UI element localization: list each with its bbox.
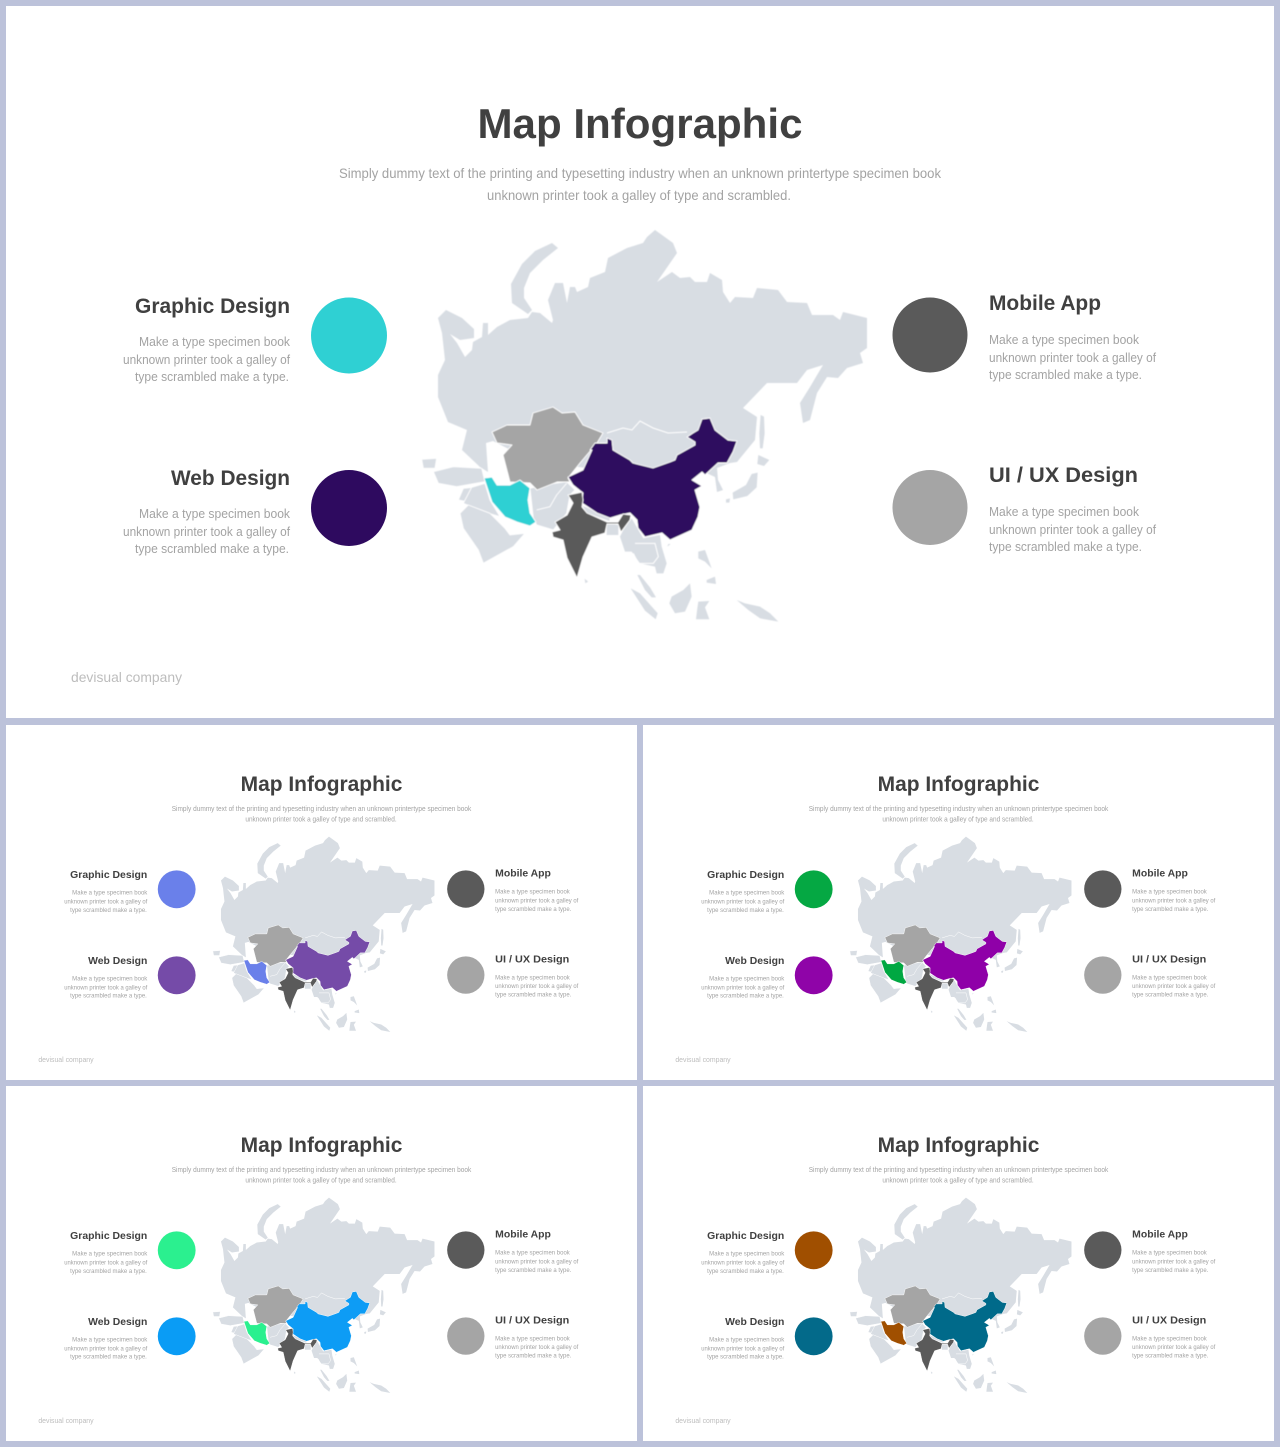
icon: Graphic Design circle bbox=[158, 1231, 196, 1269]
map of Asia bbox=[850, 1198, 1071, 1393]
item: Web Design: Make a type specimen book bbox=[139, 507, 291, 521]
icon: Graphic Design circle bbox=[795, 1231, 833, 1269]
item: UI / UX Design: Make a type specimen book bbox=[1132, 974, 1208, 981]
item: Graphic Design: unknown printer took a galley of bbox=[64, 1259, 148, 1266]
item: Mobile App: Make a type specimen book bbox=[495, 889, 571, 896]
icon: Mobile App circle bbox=[447, 1231, 484, 1269]
item: Graphic Design: Make a type specimen book bbox=[72, 1251, 148, 1258]
Middle East and South Asia light countries bbox=[422, 458, 610, 584]
item: Mobile App: type scrambled make a type. bbox=[1132, 906, 1209, 913]
icon: Web Design circle bbox=[795, 1317, 833, 1355]
item: UI / UX Design bbox=[495, 954, 579, 999]
title: Map Infographic bbox=[241, 773, 403, 796]
icon: UI / UX Design circle bbox=[1084, 956, 1121, 994]
item: Web Design: unknown printer took a galley of bbox=[64, 984, 148, 991]
item: Mobile App bbox=[1132, 1230, 1216, 1274]
icon: Mobile App circle bbox=[1084, 870, 1121, 908]
item: Graphic Design: Graphic Design bbox=[135, 295, 290, 318]
item: Graphic Design: unknown printer took a galley of bbox=[123, 353, 290, 367]
item: Graphic Design: Make a type specimen book bbox=[139, 335, 291, 349]
panel: brown and teal variant bbox=[643, 1086, 1274, 1441]
item: Graphic Design: unknown printer took a galley of bbox=[64, 898, 148, 905]
item: Mobile App: type scrambled make a type. bbox=[495, 1267, 572, 1274]
icon: UI / UX Design circle bbox=[1084, 1317, 1121, 1355]
item: Mobile App: Make a type specimen book bbox=[1132, 889, 1208, 896]
footer: devisual company bbox=[675, 1418, 731, 1425]
icon: UI / UX Design circle bbox=[892, 470, 968, 545]
Novaya Zemlya bbox=[511, 243, 558, 314]
icon: Web Design circle bbox=[158, 1317, 196, 1355]
map of Asia bbox=[422, 230, 867, 622]
item: Web Design: Web Design bbox=[88, 1317, 147, 1328]
item: Mobile App bbox=[495, 869, 579, 913]
subtitle: unknown printer took a galley of type and scrambled. bbox=[487, 187, 791, 203]
item: Graphic Design bbox=[123, 295, 291, 384]
item: Web Design: Web Design bbox=[171, 467, 290, 490]
item: Mobile App: Make a type specimen book bbox=[1132, 1250, 1208, 1257]
Southeast Asia, Japan and islands bbox=[607, 415, 778, 622]
item: Web Design: type scrambled make a type. bbox=[135, 542, 289, 556]
item: UI / UX Design: unknown printer took a galley of bbox=[1132, 983, 1216, 990]
icon: Graphic Design circle bbox=[311, 298, 387, 374]
item: Graphic Design: Graphic Design bbox=[70, 870, 147, 881]
title: Map Infographic bbox=[478, 100, 802, 147]
item: Graphic Design: type scrambled make a type. bbox=[707, 907, 784, 914]
Russia and northern Asia landmass bbox=[438, 230, 867, 492]
item: Web Design bbox=[64, 1317, 148, 1361]
item: Web Design: unknown printer took a galley of bbox=[64, 1345, 148, 1352]
item: UI / UX Design: type scrambled make a type. bbox=[1132, 1353, 1209, 1360]
item: Mobile App: unknown printer took a galley of bbox=[1132, 1258, 1216, 1266]
item: Mobile App: type scrambled make a type. bbox=[1132, 1267, 1209, 1274]
icon: Web Design circle bbox=[311, 470, 387, 546]
Mongolia border bbox=[607, 421, 687, 433]
subtitle: Simply dummy text of the printing and typesetting industry when an unknown printertype specimen book bbox=[809, 1167, 1109, 1174]
item: UI / UX Design: UI / UX Design bbox=[1132, 1315, 1206, 1326]
item: Web Design: type scrambled make a type. bbox=[707, 1354, 784, 1361]
item: Mobile App bbox=[1132, 869, 1216, 913]
map of Asia bbox=[850, 837, 1071, 1032]
item: UI / UX Design: Make a type specimen book bbox=[1132, 1335, 1208, 1342]
subtitle bbox=[809, 1167, 1109, 1185]
icon: Graphic Design circle bbox=[795, 870, 833, 908]
item: Mobile App: unknown printer took a galley of bbox=[1132, 897, 1216, 905]
icon: Mobile App circle bbox=[1084, 1231, 1121, 1269]
item: Web Design: Make a type specimen book bbox=[72, 1336, 148, 1343]
item: UI / UX Design: UI / UX Design bbox=[495, 954, 569, 965]
subtitle: unknown printer took a galley of type and scrambled. bbox=[882, 817, 1034, 824]
item: UI / UX Design: UI / UX Design bbox=[495, 1315, 569, 1326]
footer: devisual company bbox=[675, 1057, 731, 1064]
Central Asia highlighted bbox=[492, 407, 603, 490]
item: Graphic Design: Make a type specimen book bbox=[72, 890, 148, 897]
item: Web Design: Make a type specimen book bbox=[72, 975, 148, 982]
item: Web Design: unknown printer took a galley of bbox=[123, 525, 290, 539]
panel: mint and sky blue variant bbox=[6, 1086, 637, 1441]
subtitle: Simply dummy text of the printing and typesetting industry when an unknown printertype specimen book bbox=[172, 1167, 472, 1174]
item: UI / UX Design: type scrambled make a type. bbox=[495, 992, 572, 999]
China highlighted bbox=[568, 418, 737, 540]
subtitle: unknown printer took a galley of type and scrambled. bbox=[245, 817, 397, 824]
item: UI / UX Design bbox=[1132, 954, 1216, 999]
item: Web Design: type scrambled make a type. bbox=[70, 993, 147, 1000]
item: Graphic Design: Graphic Design bbox=[707, 1231, 784, 1242]
item: UI / UX Design bbox=[495, 1315, 579, 1360]
map of Asia bbox=[213, 837, 434, 1032]
item: Mobile App: Make a type specimen book bbox=[495, 1250, 571, 1257]
item: Mobile App: unknown printer took a galley of bbox=[495, 897, 579, 905]
item: Web Design bbox=[64, 956, 148, 1000]
icon: Graphic Design circle bbox=[158, 870, 196, 908]
item: UI / UX Design: unknown printer took a galley of bbox=[495, 1344, 579, 1351]
item: Mobile App: unknown printer took a galley of bbox=[495, 1258, 579, 1266]
item: UI / UX Design bbox=[989, 464, 1156, 554]
item: Web Design: Make a type specimen book bbox=[709, 975, 785, 982]
item: UI / UX Design: UI / UX Design bbox=[1132, 954, 1206, 965]
map of Asia bbox=[213, 1198, 434, 1393]
item: Mobile App: unknown printer took a galley of bbox=[989, 351, 1156, 365]
panel: green and magenta variant bbox=[643, 725, 1274, 1080]
item: Graphic Design: type scrambled make a type. bbox=[70, 1268, 147, 1275]
icon: Web Design circle bbox=[795, 956, 833, 994]
subtitle bbox=[339, 165, 942, 203]
subtitle bbox=[172, 1167, 472, 1185]
item: Web Design: Web Design bbox=[88, 956, 147, 967]
footer: devisual company bbox=[71, 669, 182, 685]
panel: blue and purple variant bbox=[6, 725, 637, 1080]
item: Graphic Design: Make a type specimen book bbox=[709, 890, 785, 897]
item: Graphic Design bbox=[701, 1231, 785, 1275]
item: UI / UX Design bbox=[1132, 1315, 1216, 1360]
item: Mobile App: Mobile App bbox=[1132, 869, 1188, 880]
item: Web Design: Make a type specimen book bbox=[709, 1336, 785, 1343]
icon: Web Design circle bbox=[158, 956, 196, 994]
item: Web Design bbox=[701, 956, 785, 1000]
footer: devisual company bbox=[38, 1418, 94, 1425]
item: Graphic Design bbox=[701, 870, 785, 914]
item: Graphic Design: unknown printer took a galley of bbox=[701, 898, 785, 905]
item: Graphic Design: Graphic Design bbox=[70, 1231, 147, 1242]
item: Web Design bbox=[701, 1317, 785, 1361]
item: Graphic Design: unknown printer took a galley of bbox=[701, 1259, 785, 1266]
item: UI / UX Design: unknown printer took a galley of bbox=[989, 523, 1156, 537]
item: Web Design: type scrambled make a type. bbox=[707, 993, 784, 1000]
item: Graphic Design bbox=[64, 870, 148, 914]
subtitle bbox=[172, 806, 472, 824]
item: Graphic Design: Make a type specimen book bbox=[709, 1251, 785, 1258]
item: UI / UX Design: type scrambled make a type. bbox=[989, 540, 1142, 554]
item: UI / UX Design: type scrambled make a type. bbox=[1132, 992, 1209, 999]
item: UI / UX Design: unknown printer took a galley of bbox=[1132, 1344, 1216, 1351]
item: Web Design: Web Design bbox=[725, 956, 784, 967]
icon: Mobile App circle bbox=[892, 298, 968, 372]
item: Web Design: Web Design bbox=[725, 1317, 784, 1328]
subtitle: Simply dummy text of the printing and typesetting industry when an unknown printertype specimen book bbox=[339, 165, 942, 181]
subtitle: Simply dummy text of the printing and typesetting industry when an unknown printertype specimen book bbox=[809, 806, 1109, 813]
item: Mobile App bbox=[989, 292, 1156, 382]
item: Web Design bbox=[123, 467, 291, 556]
item: Mobile App: type scrambled make a type. bbox=[989, 368, 1142, 382]
item: Web Design: unknown printer took a galley of bbox=[701, 984, 785, 991]
subtitle: unknown printer took a galley of type and scrambled. bbox=[882, 1178, 1034, 1185]
item: Graphic Design: Graphic Design bbox=[707, 870, 784, 881]
panel: large map infographic bbox=[6, 6, 1274, 718]
item: Mobile App: Mobile App bbox=[989, 292, 1101, 315]
item: Graphic Design: type scrambled make a type. bbox=[70, 907, 147, 914]
item: Mobile App: Make a type specimen book bbox=[989, 333, 1140, 347]
subtitle bbox=[809, 806, 1109, 824]
item: Web Design: unknown printer took a galley of bbox=[701, 1345, 785, 1352]
item: Mobile App: Mobile App bbox=[1132, 1230, 1188, 1241]
India highlighted bbox=[552, 492, 631, 578]
icon: UI / UX Design circle bbox=[447, 1317, 484, 1355]
item: UI / UX Design: Make a type specimen book bbox=[989, 505, 1140, 519]
footer: devisual company bbox=[38, 1057, 94, 1064]
item: UI / UX Design: Make a type specimen book bbox=[495, 974, 571, 981]
item: Mobile App: type scrambled make a type. bbox=[495, 906, 572, 913]
subtitle: Simply dummy text of the printing and typesetting industry when an unknown printertype specimen book bbox=[172, 806, 472, 813]
title: Map Infographic bbox=[878, 773, 1040, 796]
item: Mobile App bbox=[495, 1230, 579, 1274]
item: UI / UX Design: type scrambled make a type. bbox=[495, 1353, 572, 1360]
Iran highlighted bbox=[484, 477, 536, 526]
item: Graphic Design: type scrambled make a type. bbox=[707, 1268, 784, 1275]
subtitle: unknown printer took a galley of type and scrambled. bbox=[245, 1178, 397, 1185]
item: UI / UX Design: Make a type specimen book bbox=[495, 1335, 571, 1342]
item: UI / UX Design: unknown printer took a galley of bbox=[495, 983, 579, 990]
item: Web Design: type scrambled make a type. bbox=[70, 1354, 147, 1361]
title: Map Infographic bbox=[878, 1134, 1040, 1157]
title: Map Infographic bbox=[241, 1134, 403, 1157]
item: Mobile App: Mobile App bbox=[495, 1230, 551, 1241]
item: Graphic Design bbox=[64, 1231, 148, 1275]
icon: Mobile App circle bbox=[447, 870, 484, 908]
item: UI / UX Design: UI / UX Design bbox=[989, 464, 1138, 487]
item: Mobile App: Mobile App bbox=[495, 869, 551, 880]
icon: UI / UX Design circle bbox=[447, 956, 484, 994]
item: Graphic Design: type scrambled make a type. bbox=[135, 370, 289, 384]
